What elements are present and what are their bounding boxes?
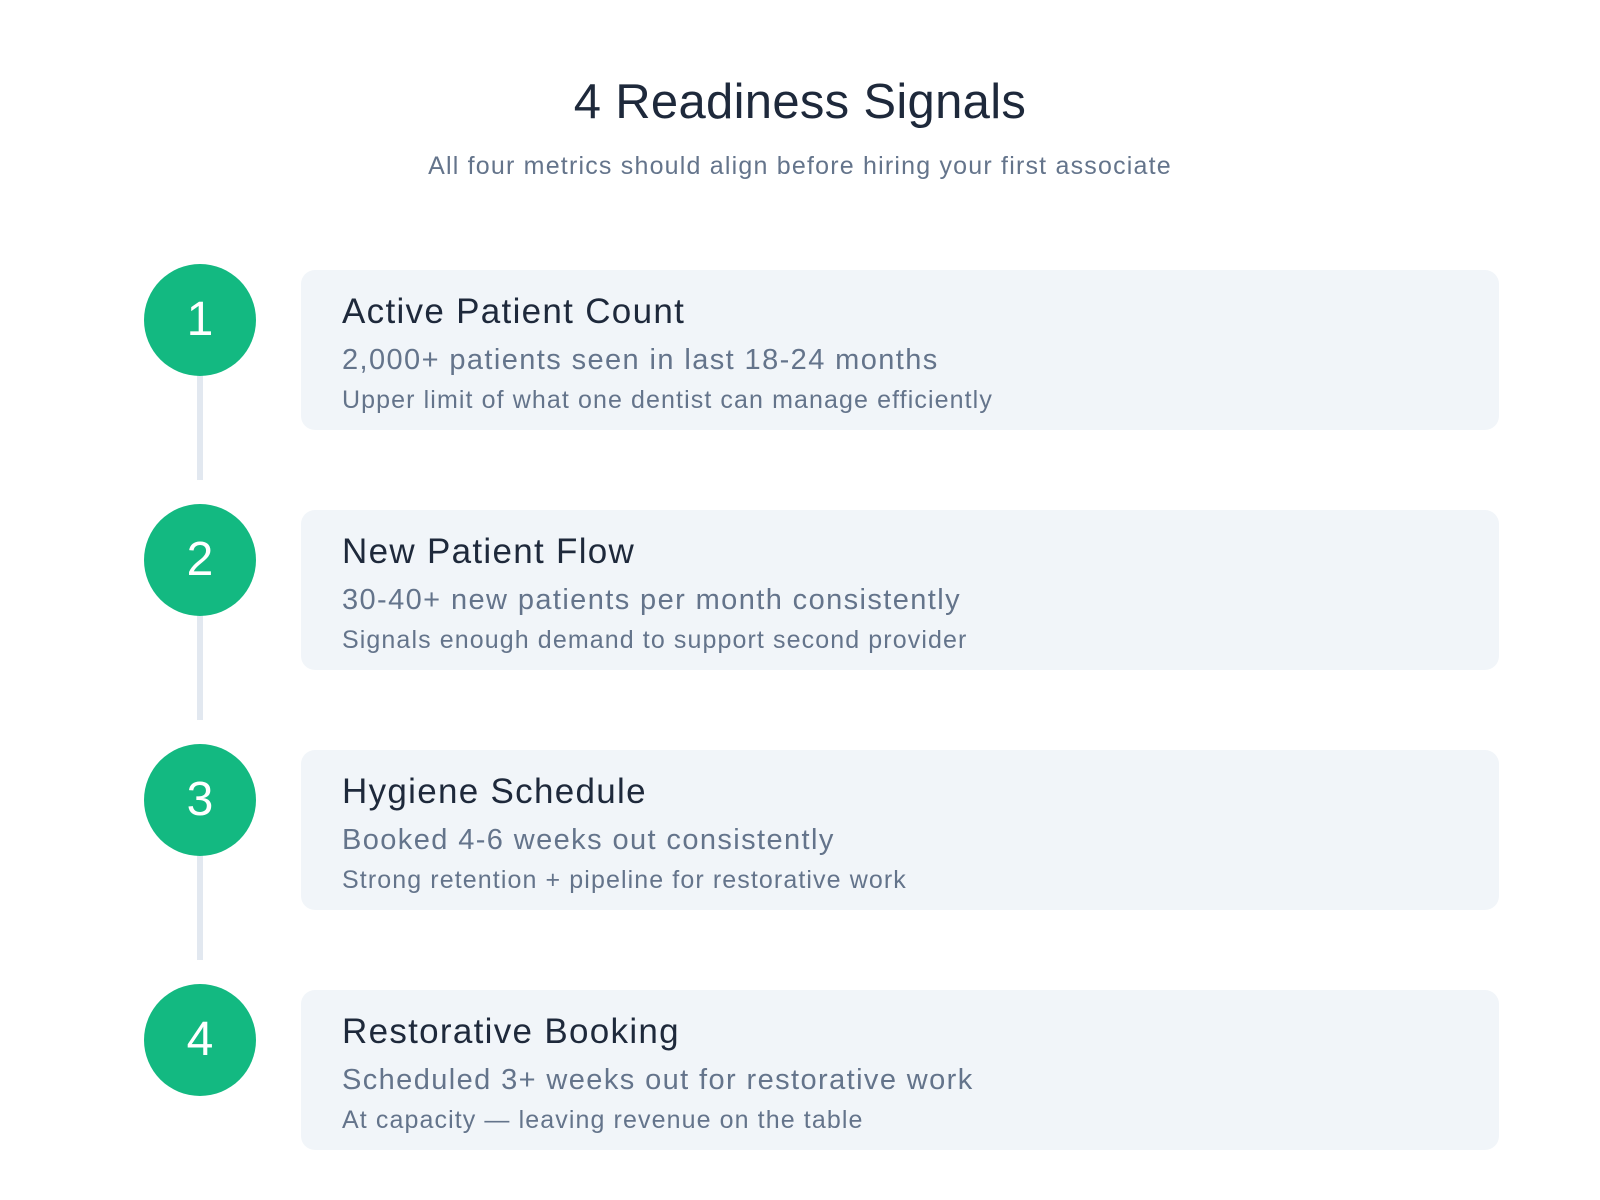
card 1: 2,000+ patients seen in last 18-24 months bbox=[342, 344, 939, 376]
card 3: Strong retention + pipeline for restorative work bbox=[342, 866, 907, 894]
step 1 circle bbox=[144, 264, 256, 376]
step 3 circle: 3 bbox=[187, 773, 213, 826]
subtitle: All four metrics should align before hiring your first associate bbox=[428, 152, 1172, 180]
card 4: Restorative Booking bbox=[342, 1012, 680, 1051]
step 3 circle bbox=[144, 744, 256, 856]
card 2: Signals enough demand to support second provider bbox=[342, 626, 967, 654]
step 4 circle: 4 bbox=[187, 1013, 213, 1066]
card 1: Active Patient Count bbox=[342, 292, 685, 331]
card 1 bbox=[301, 270, 1499, 430]
title: 4 Readiness Signals bbox=[574, 75, 1026, 129]
card 4: At capacity — leaving revenue on the table bbox=[342, 1106, 864, 1134]
step 1 circle: 1 bbox=[187, 293, 213, 346]
step 4 circle bbox=[144, 984, 256, 1096]
card 2: 30-40+ new patients per month consistently bbox=[342, 584, 961, 616]
card 4: Scheduled 3+ weeks out for restorative work bbox=[342, 1064, 974, 1096]
card 3 bbox=[301, 750, 1499, 910]
card 2 bbox=[301, 510, 1499, 670]
step 2 circle bbox=[144, 504, 256, 616]
connector line 3 bbox=[197, 848, 203, 960]
card 3: Booked 4-6 weeks out consistently bbox=[342, 824, 835, 856]
connector line 1 bbox=[197, 368, 203, 480]
card 4 bbox=[301, 990, 1499, 1150]
step 2 circle: 2 bbox=[187, 533, 213, 586]
card 1: Upper limit of what one dentist can manage efficiently bbox=[342, 386, 993, 414]
card 2: New Patient Flow bbox=[342, 532, 635, 571]
card 3: Hygiene Schedule bbox=[342, 772, 647, 811]
connector line 2 bbox=[197, 608, 203, 720]
